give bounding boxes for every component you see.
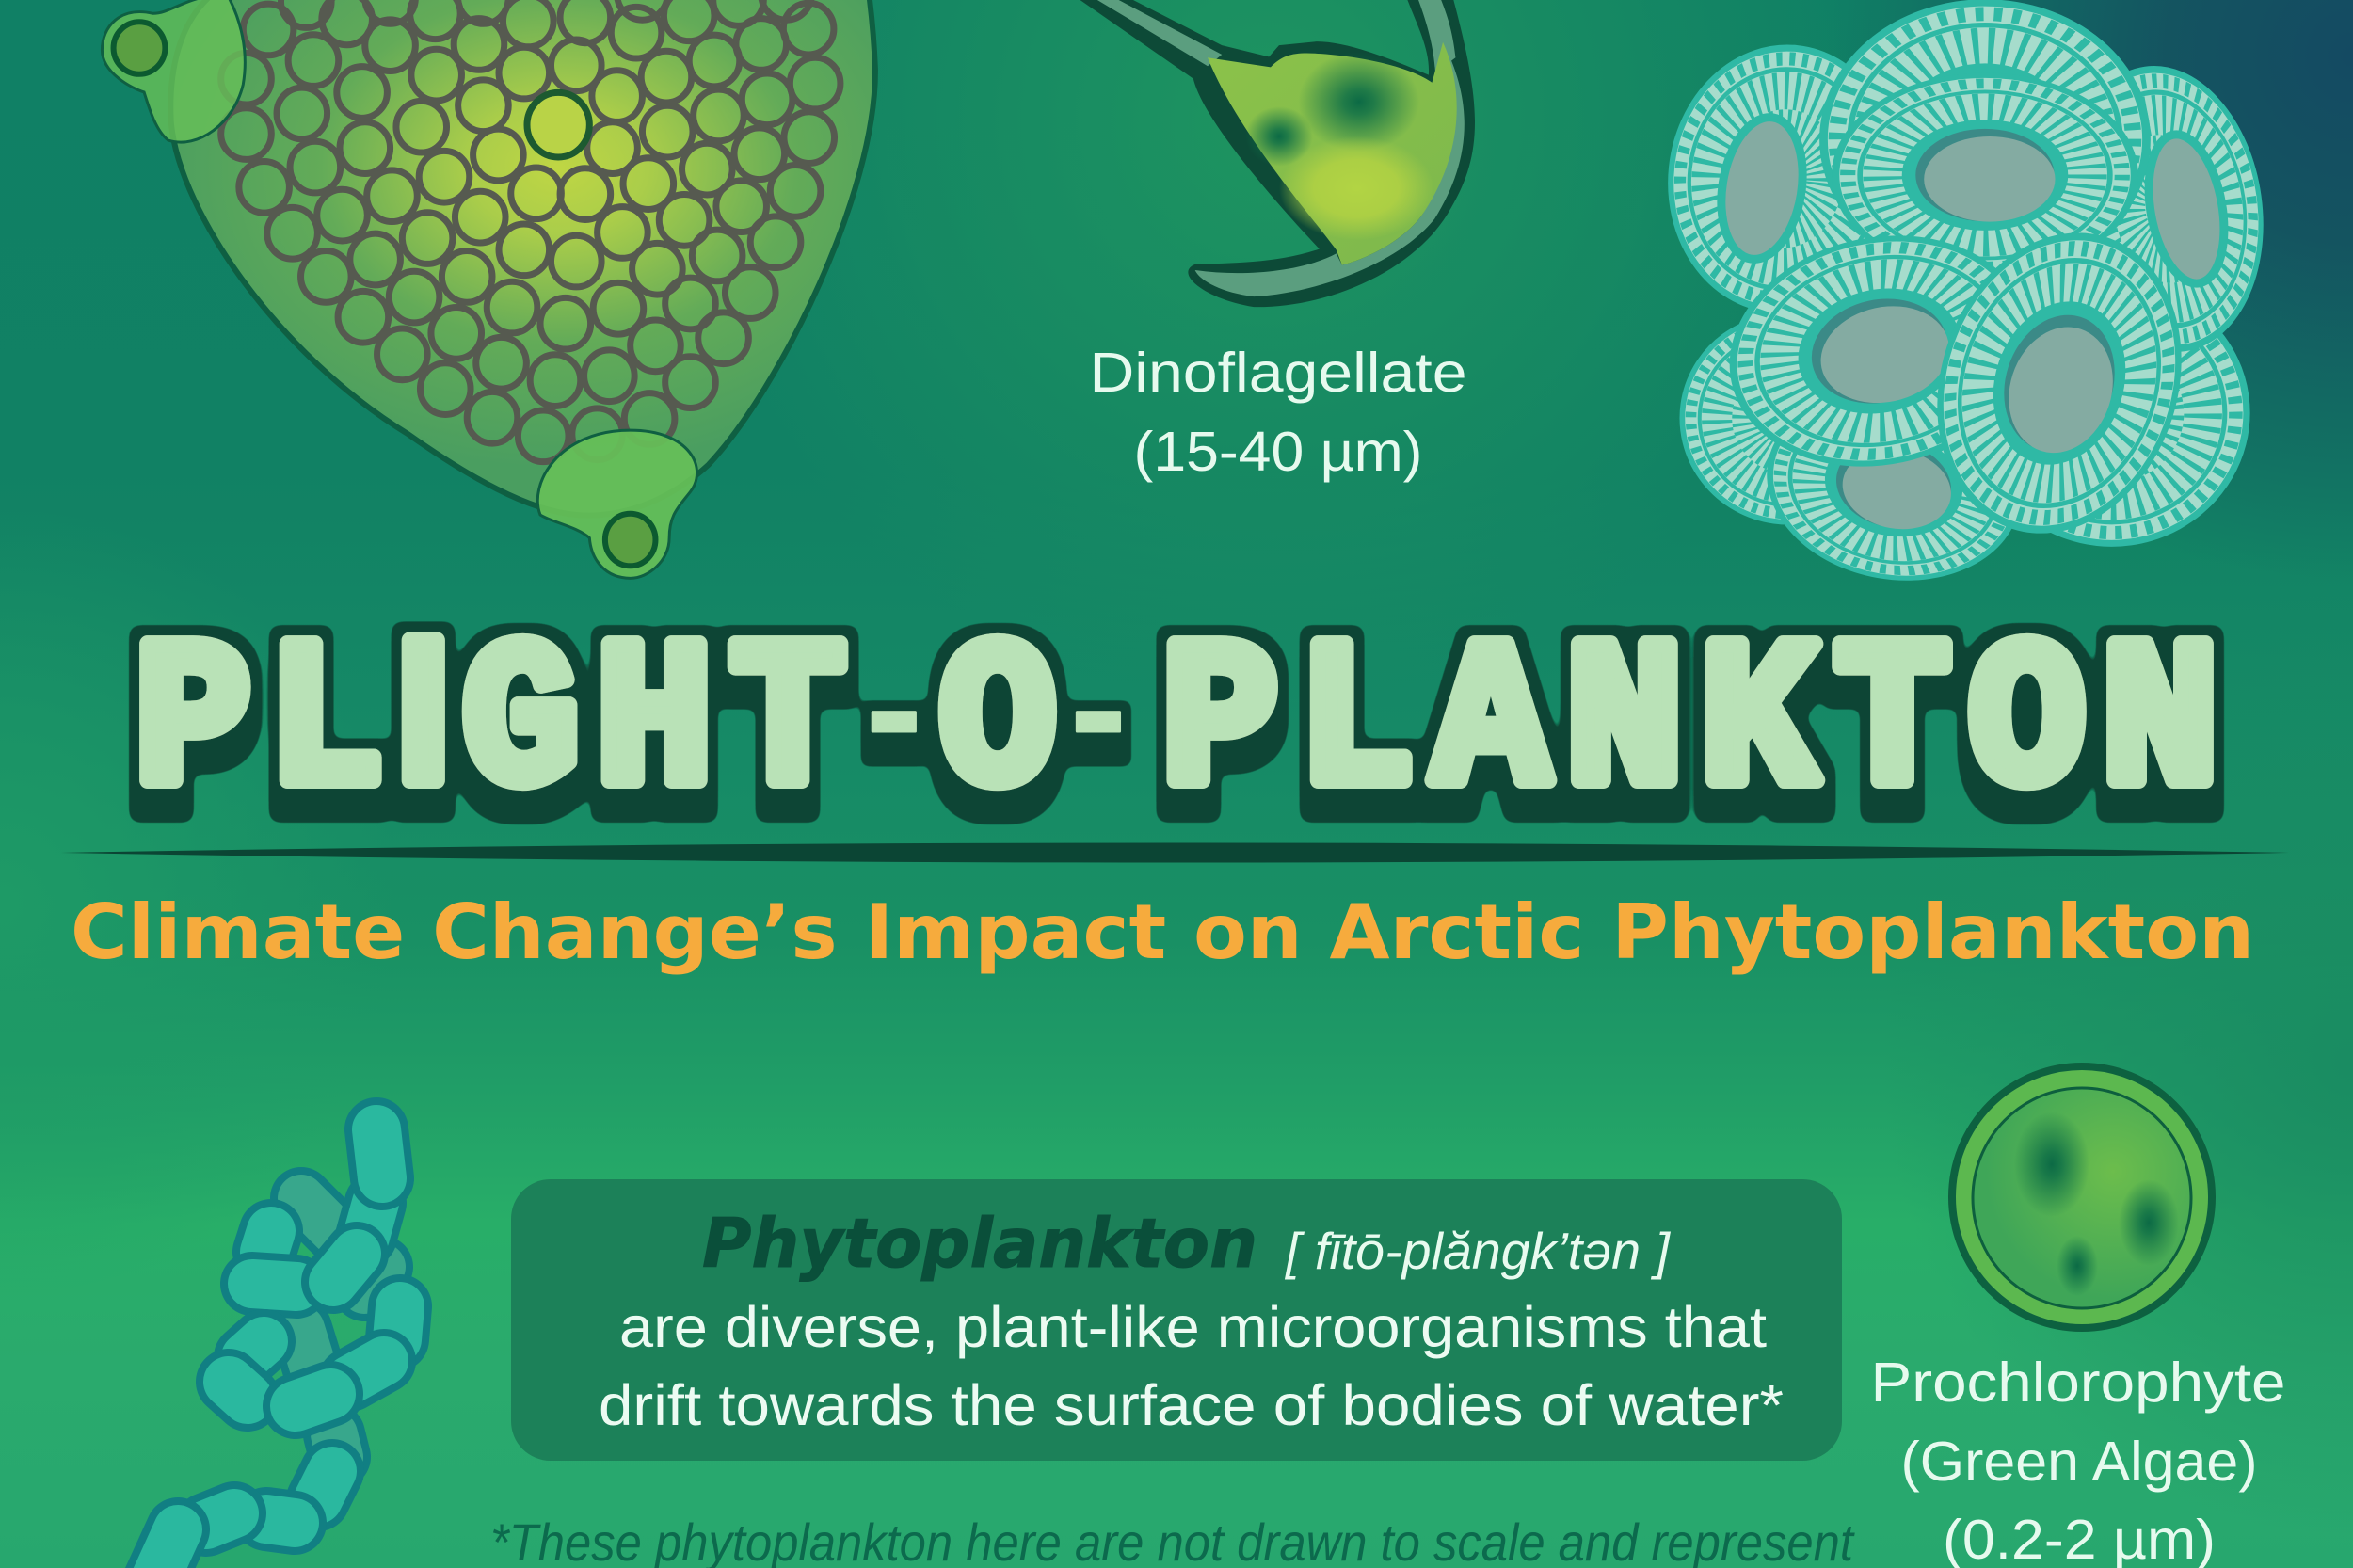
- dinoflagellate organelles: [1245, 52, 1433, 240]
- subtitle: Climate Change’s Impact on Arctic Phytoplankton: [71, 888, 2254, 976]
- title: O: [939, 609, 1056, 843]
- cell interior: [1973, 1088, 2191, 1308]
- dinoflagellate flagella: [1095, 0, 1465, 296]
- icon: volvox colony: [102, 0, 875, 578]
- dinoflagellate shell: [1078, 0, 1475, 307]
- top-left nucleus: [114, 22, 165, 74]
- title: [135, 597, 2218, 843]
- divider: [61, 843, 2289, 862]
- icon: prochlorophyte: [1952, 1066, 2212, 1328]
- organelles: [2014, 1112, 2179, 1296]
- definition line 1: are diverse, plant-like microorganisms that: [619, 1295, 1767, 1359]
- bottom lobe: [537, 430, 697, 578]
- filament back segments: [301, 1198, 382, 1457]
- heading: phytoplankton: Phytoplankton: [702, 1204, 1257, 1283]
- bottom nucleus: [605, 514, 655, 566]
- label: green algae: (Green Algae): [1901, 1431, 2257, 1493]
- cell wall: [1952, 1066, 2212, 1328]
- title: -: [1053, 631, 1144, 812]
- definition line 2: drift towards the surface of bodies of water*: [599, 1373, 1784, 1437]
- label: prochlorophyte: Prochlorophyte: [1871, 1352, 2285, 1414]
- volvox nucleus: [527, 92, 589, 157]
- pronunciation: [ fītō-plăngk’tən ]: [1284, 1222, 1672, 1280]
- title: PLIGHT: [135, 597, 846, 843]
- panel: definition: [511, 1179, 1842, 1461]
- icon: dinoflagellate: [1078, 0, 1475, 307]
- title: PLANKTON: [1161, 609, 2218, 843]
- icon: cyanobacteria filament: [154, 1129, 400, 1568]
- dinoflagellate body: [1208, 42, 1457, 265]
- volvox body: [170, 0, 875, 516]
- label: dinoflagellate size: (15-40 µm): [1133, 421, 1423, 483]
- title: -: [849, 631, 939, 812]
- filament front segments: [154, 1129, 400, 1568]
- volvox daughter cells: [221, 0, 840, 462]
- top-left lobe: [102, 0, 245, 142]
- icon: coccolithophore: [1658, 3, 2279, 597]
- label: dinoflagellate: Dinoflagellate: [1090, 342, 1466, 404]
